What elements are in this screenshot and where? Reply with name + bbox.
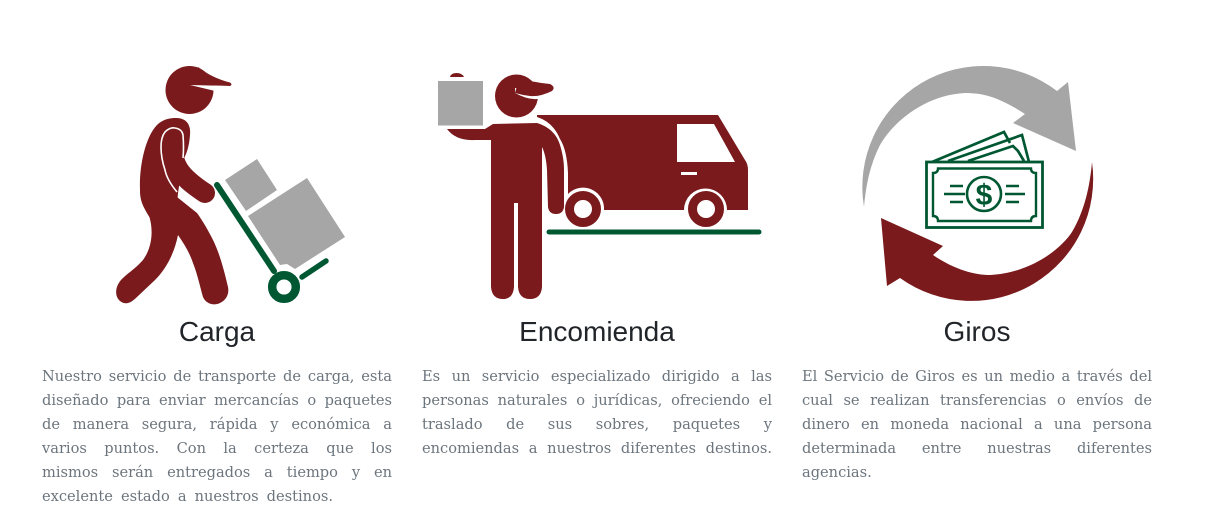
small box xyxy=(225,159,277,211)
text block: Encomienda xyxy=(422,368,772,457)
arm outline xyxy=(161,128,184,192)
red arrow xyxy=(881,162,1093,301)
text block: Encomienda: encomiendas a nuestros diferentes destinos. xyxy=(422,440,772,457)
front note xyxy=(926,162,1042,228)
text block: Carga: varios puntos. Con la certeza que los xyxy=(42,440,392,457)
back notes xyxy=(932,132,1029,162)
ground line xyxy=(549,230,759,234)
text block: Giros xyxy=(802,368,1152,481)
text block: Carga: diseñado para enviar mercancías o paquetes xyxy=(42,392,392,409)
worker fingers xyxy=(450,73,464,77)
text block: Encomienda: personas naturales o jurídicas, ofreciendo el xyxy=(422,392,772,409)
worker head with cap xyxy=(495,74,554,118)
worker torso xyxy=(140,118,190,218)
text block: Carga: mismos serán entregados a tiempo y en xyxy=(42,464,392,481)
text block: Giros: El Servicio de Giros es un medio a través del xyxy=(802,368,1152,385)
van wheels xyxy=(570,196,720,222)
icon: worker with parcel and van xyxy=(438,73,759,299)
text block: Carga: Nuestro servicio de transporte de carga, esta xyxy=(42,368,392,385)
banknotes xyxy=(926,132,1042,228)
text block: Carga xyxy=(42,368,392,505)
worker head with cap xyxy=(166,66,240,114)
text block: Giros: agencias. xyxy=(802,464,872,481)
text block: Giros: determinada entre nuestras diferentes xyxy=(802,440,1152,457)
text block: Carga: de manera segura, rápida y económica a xyxy=(42,416,392,433)
icon: money exchange arrows xyxy=(862,66,1093,301)
heading: Carga: Carga xyxy=(179,316,255,347)
worker arm xyxy=(172,138,205,193)
parcel xyxy=(438,81,483,126)
dollar sign: $ xyxy=(976,179,993,212)
heading: Encomienda: Encomienda xyxy=(519,316,675,347)
note lines xyxy=(944,186,1025,202)
worker body xyxy=(447,123,564,299)
hand truck xyxy=(217,185,326,299)
worker legs xyxy=(116,197,228,304)
text block: Encomienda: traslado de sus sobres, paquetes y xyxy=(422,416,772,433)
text block: Giros: cual se realizan transferencias o envíos de xyxy=(802,392,1152,409)
note frame xyxy=(933,168,1036,221)
van xyxy=(537,115,748,210)
large box xyxy=(248,178,345,269)
text block: Encomienda: Es un servicio especializado dirigido a las xyxy=(422,368,772,385)
icon: delivery worker with hand truck xyxy=(116,66,345,304)
text block: Giros: dinero en moneda nacional a una persona xyxy=(802,416,1152,433)
gray arrow xyxy=(862,66,1076,207)
coin xyxy=(967,177,1001,211)
text block: Carga: excelente estado a nuestros destinos. xyxy=(42,488,333,505)
heading: Giros: Giros xyxy=(944,316,1010,347)
